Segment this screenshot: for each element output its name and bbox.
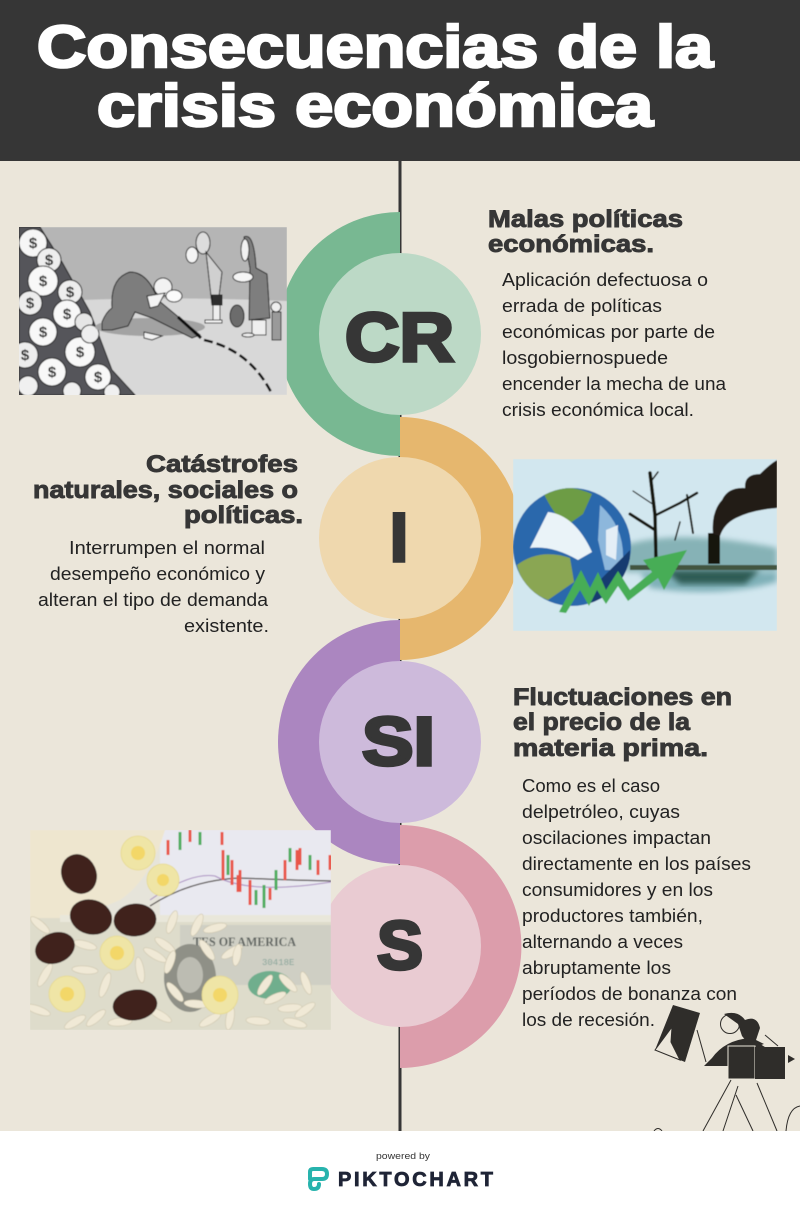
section SI: half ring and circle (278, 620, 481, 864)
body text: productores también, (522, 906, 703, 926)
coffee beans (31, 849, 159, 1023)
body text: los de recesión. (522, 1010, 655, 1030)
body text: existente. (184, 616, 269, 636)
body text: alteran el tipo de demanda (38, 590, 269, 610)
body text: encender la mecha de una (502, 374, 727, 394)
corn kernels (49, 836, 238, 1014)
dollar signs: $ (66, 284, 75, 301)
dollar signs (21, 235, 103, 386)
heading: económicas. (488, 231, 654, 258)
stock chart area (30, 830, 331, 925)
dollar signs: $ (21, 347, 30, 364)
body text: losgobiernospuede (502, 348, 668, 368)
body text (38, 538, 269, 636)
image: earth, dead tree and smokestack with green arrow (513, 459, 777, 631)
earth globe (513, 488, 631, 606)
central timeline line (398, 161, 402, 1131)
body text: abruptamente los (522, 958, 671, 978)
section CR: half ring and circle (278, 212, 481, 456)
body text: consumidores y en los (522, 880, 713, 900)
dead tree (630, 472, 697, 560)
body text: económicas por parte de (502, 322, 715, 342)
heading: el precio de la (513, 709, 691, 736)
section SI: half ring and circle: SI (362, 703, 435, 780)
body text: períodos de bonanza con (522, 984, 737, 1004)
section S: half ring and circle: S (377, 907, 423, 984)
header banner (0, 0, 800, 161)
title: crisis económica (97, 73, 654, 139)
legs (703, 1080, 777, 1131)
piktochart wordmark: PIKTOCHART (338, 1169, 493, 1191)
dollar signs: $ (45, 252, 54, 269)
powered by label: powered by (376, 1151, 430, 1162)
body text: crisis económica local. (502, 400, 694, 420)
heading: políticas. (184, 502, 303, 529)
heading (513, 684, 732, 762)
body text: delpetróleo, cuyas (522, 802, 680, 822)
image: cartoon of man drawing a line beside money bags (12, 227, 287, 400)
heading: Fluctuaciones en (513, 684, 732, 711)
section I: half ring and circle (319, 417, 521, 660)
heading: Malas políticas (488, 206, 683, 233)
body text: errada de políticas (502, 296, 662, 316)
body text: oscilaciones impactan (522, 828, 711, 848)
dollar signs: $ (29, 235, 38, 252)
text block: Malas políticas económicas (488, 206, 727, 420)
heading: materia prima. (513, 735, 708, 762)
dollar bill: TES OF AMERICA (193, 934, 297, 949)
dollar signs: $ (39, 324, 48, 341)
text block: Catástrofes naturales, sociales o políticas (33, 451, 303, 636)
section CR: half ring and circle: CR (345, 299, 454, 376)
body text (502, 270, 727, 420)
text block: Fluctuaciones en el precio de la materia prima (513, 684, 751, 1030)
green growth arrow (559, 550, 687, 613)
title: Consecuencias de la (37, 14, 714, 80)
image: coffee beans, corn and rice over dollar and stock chart (24, 830, 331, 1031)
section S: half ring and circle (319, 825, 521, 1068)
body text: Aplicación defectuosa o (502, 270, 708, 290)
body text: directamente en los países (522, 854, 751, 874)
dollar signs: $ (63, 306, 72, 323)
dollar signs: $ (76, 344, 85, 361)
body text: Interrumpen el normal (69, 538, 265, 558)
heading (488, 206, 683, 258)
dollar signs: $ (26, 295, 35, 312)
folders (728, 1046, 755, 1079)
head and hair (720, 1014, 740, 1034)
landscape band (625, 537, 777, 572)
dollar bill (30, 915, 331, 1030)
body text: alternando a veces (522, 932, 683, 952)
dashed line (204, 340, 272, 394)
heading (33, 451, 303, 529)
body text: desempeño económico y (50, 564, 265, 584)
body text (522, 776, 751, 1030)
money bags pile (12, 227, 135, 400)
rice grains (24, 909, 317, 1031)
section I: half ring and circle: I (390, 499, 408, 576)
document (655, 1005, 700, 1062)
dollar bill: 30418E (262, 958, 294, 968)
dollar signs: $ (94, 369, 103, 386)
man crawling (95, 272, 205, 340)
heading: Catástrofes (146, 451, 298, 478)
title (37, 14, 714, 139)
body text: Como es el caso (522, 776, 660, 796)
smokestack and smoke (708, 533, 720, 564)
torso (704, 1038, 770, 1079)
dollar signs: $ (39, 273, 48, 290)
family figures (186, 232, 281, 340)
icon: piktochart logo (310, 1169, 327, 1189)
footer (0, 1131, 800, 1211)
illustration: woman carrying documents (654, 1005, 800, 1131)
dollar signs: $ (48, 364, 57, 381)
heading: naturales, sociales o (33, 477, 298, 504)
